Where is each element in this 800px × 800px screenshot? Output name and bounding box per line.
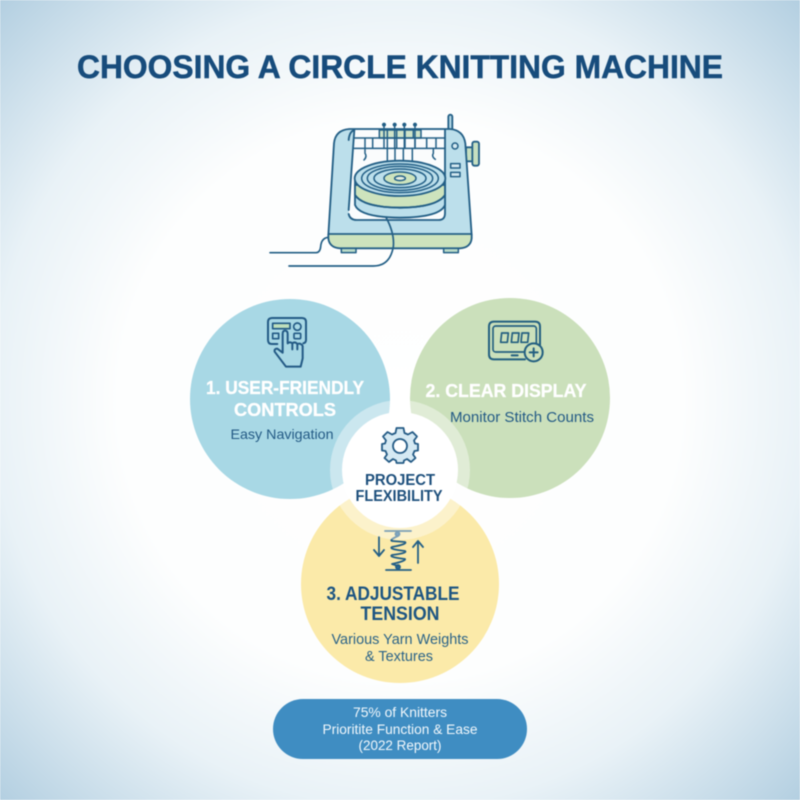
antenna bbox=[448, 115, 452, 131]
heading: 3. ADJUSTABLE bbox=[326, 583, 460, 605]
panel: adjustable tension: TENSION bbox=[360, 603, 440, 625]
icon: control panel with hand bbox=[268, 318, 306, 367]
panel: adjustable tension bbox=[301, 485, 499, 683]
icon: digital display bbox=[489, 322, 543, 361]
center hub: project flexibility bbox=[330, 400, 470, 540]
base bbox=[328, 234, 472, 248]
window bbox=[349, 130, 445, 220]
subtext: Monitor Stitch Counts bbox=[450, 410, 594, 426]
subtext: Easy Navigation bbox=[230, 426, 334, 442]
panel: clear display bbox=[410, 298, 610, 498]
label: PROJECT bbox=[365, 472, 435, 489]
feet bbox=[341, 248, 458, 253]
left post bbox=[349, 130, 354, 210]
white arms between circles bbox=[390, 400, 410, 430]
panel: user-friendly controls bbox=[190, 299, 390, 499]
icon: gear bbox=[382, 428, 418, 463]
title: CHOOSING A CIRCLE KNITTING MACHINE bbox=[77, 49, 723, 85]
yarn cords bbox=[270, 237, 328, 253]
yarn stack bbox=[355, 161, 445, 218]
needle bed bbox=[354, 130, 445, 160]
illustration: circle knitting machine bbox=[270, 115, 479, 266]
needles bbox=[383, 123, 416, 173]
machine frame bbox=[328, 129, 472, 235]
subtext: Various Yarn Weights bbox=[332, 631, 468, 648]
heading: 1. USER-FRIENDLY bbox=[206, 377, 365, 398]
heading: 2. CLEAR DISPLAY bbox=[426, 380, 587, 401]
callout: statistic pill: 75% of Knitters bbox=[353, 704, 447, 720]
side knob bbox=[466, 142, 479, 166]
panel: adjustable tension: & Textures bbox=[365, 648, 433, 665]
icon: spring with arrows bbox=[374, 531, 423, 570]
controls on right panel bbox=[451, 143, 460, 177]
center hub: project flexibility: FLEXIBILITY bbox=[356, 488, 443, 505]
panel: user-friendly controls: CONTROLS bbox=[234, 399, 336, 420]
callout: statistic pill bbox=[273, 699, 527, 759]
callout: statistic pill: (2022 Report) bbox=[358, 737, 442, 753]
callout: statistic pill: Prioritite Function & Ease bbox=[322, 721, 478, 737]
